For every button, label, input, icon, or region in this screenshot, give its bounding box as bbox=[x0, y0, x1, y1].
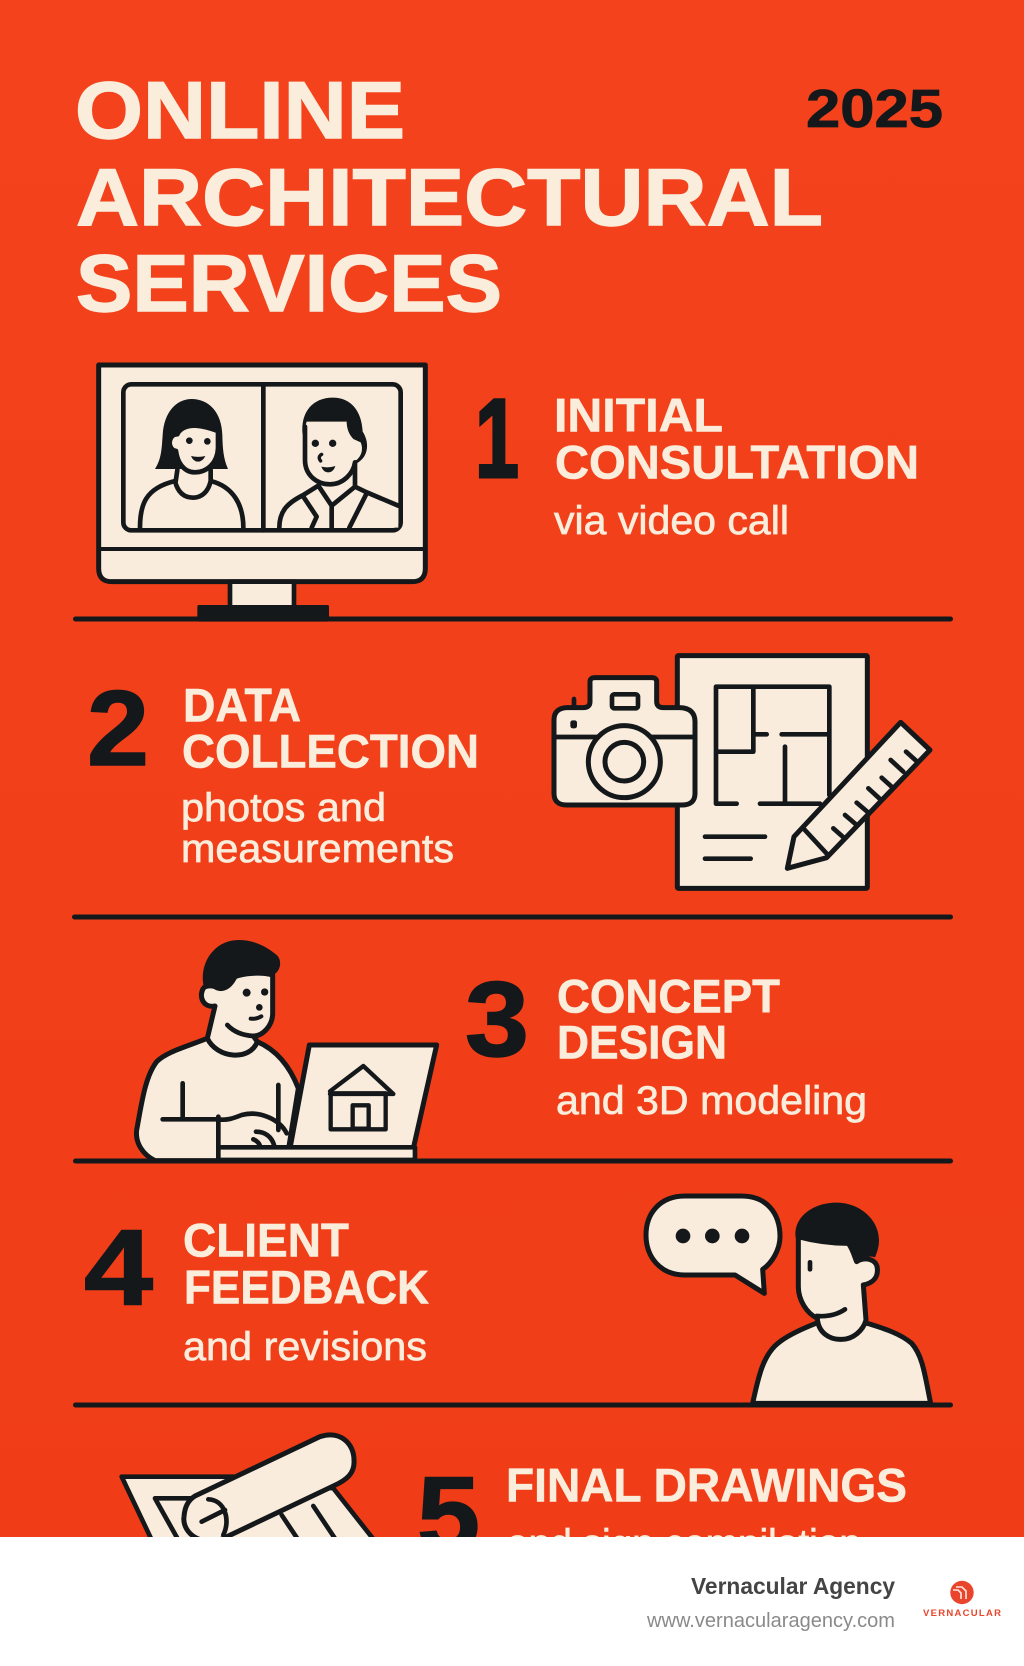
step 1 heading: CONSULTATION bbox=[555, 436, 919, 490]
icon: designer at laptop bbox=[136, 940, 437, 1161]
panel: step 2 data collection bbox=[87, 656, 930, 888]
speech bubble bbox=[646, 1196, 780, 1293]
step 2 subtitle: photos and bbox=[181, 786, 386, 830]
floor plan sheet bbox=[677, 656, 867, 888]
step number 5: 5 bbox=[417, 1454, 480, 1574]
logo: VERNACULAR bbox=[923, 1608, 1001, 1619]
step number 1: 1 bbox=[475, 376, 519, 501]
logo bbox=[923, 1581, 1001, 1619]
step 3 heading bbox=[557, 970, 780, 1070]
ruler pencil bbox=[787, 722, 930, 868]
icon: monitor with video call bbox=[99, 365, 425, 622]
step number 2: 2 bbox=[87, 668, 149, 788]
step 4 subtitle: and revisions bbox=[183, 1325, 427, 1369]
step 3 heading: CONCEPT bbox=[557, 970, 780, 1024]
man on call bbox=[279, 398, 398, 528]
title: SERVICES bbox=[76, 239, 502, 329]
person bbox=[753, 1203, 931, 1403]
icon: person with speech bubble bbox=[646, 1196, 931, 1403]
paper roll bbox=[184, 1435, 354, 1541]
panel: step 1 initial consultation bbox=[99, 365, 919, 622]
title: ONLINE bbox=[75, 66, 405, 156]
step 2 subtitle: measurements bbox=[181, 827, 454, 871]
person bbox=[136, 940, 298, 1161]
step 2 subtitle bbox=[181, 786, 454, 871]
step 3 heading: DESIGN bbox=[557, 1016, 727, 1070]
panel: step 4 client feedback bbox=[84, 1196, 931, 1403]
title bbox=[75, 66, 823, 329]
step 2 heading bbox=[182, 680, 479, 778]
year: 2025 bbox=[806, 79, 943, 139]
step number 3: 3 bbox=[465, 959, 529, 1079]
agency website: www.vernacularagency.com bbox=[646, 1609, 895, 1632]
step 4 heading: CLIENT bbox=[183, 1214, 349, 1268]
step 5 heading: FINAL DRAWINGS bbox=[506, 1460, 907, 1512]
panel: step 3 concept design bbox=[136, 940, 867, 1161]
camera bbox=[554, 678, 695, 805]
step 4 heading: FEEDBACK bbox=[184, 1262, 429, 1314]
icon: rolled blueprint bbox=[122, 1435, 377, 1543]
agency name: Vernacular Agency bbox=[691, 1573, 895, 1599]
blueprint lines bbox=[155, 1498, 336, 1540]
step 5 subtitle, cut off by the footer: and sign compilation bbox=[507, 1522, 861, 1566]
woman on call bbox=[140, 399, 243, 528]
icon: camera, floor plan and ruler pencil bbox=[554, 656, 930, 888]
step 4 heading bbox=[183, 1214, 429, 1314]
step 1 subtitle: via video call bbox=[554, 499, 789, 543]
blueprint sheet bbox=[122, 1477, 377, 1543]
step 1 heading: INITIAL bbox=[554, 390, 723, 442]
panel: step 5 final drawings bbox=[122, 1435, 907, 1574]
step number 4: 4 bbox=[84, 1206, 153, 1328]
step 3 subtitle: and 3D modeling bbox=[556, 1079, 867, 1123]
step 2 heading: COLLECTION bbox=[182, 726, 479, 778]
step 2 heading: DATA bbox=[183, 680, 301, 732]
footer panel bbox=[0, 1537, 1024, 1666]
laptop with house bbox=[218, 1045, 437, 1160]
title: ARCHITECTURAL bbox=[76, 153, 823, 243]
step 1 heading bbox=[554, 390, 919, 490]
